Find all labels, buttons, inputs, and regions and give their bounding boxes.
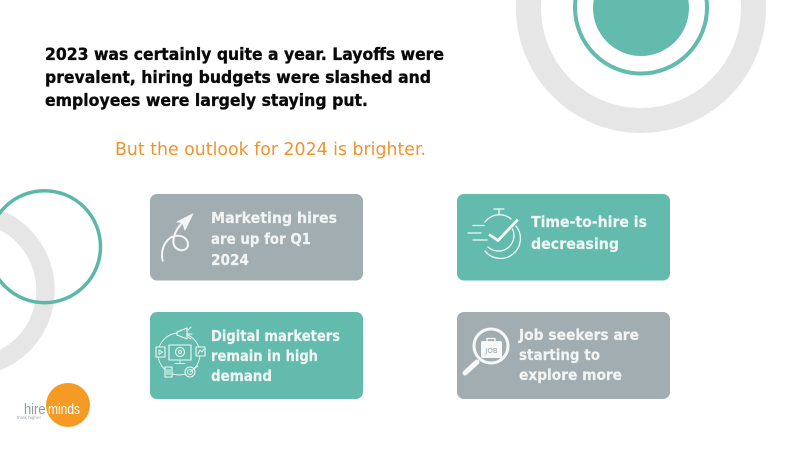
card: time-to-hire <box>457 194 670 280</box>
card text: Time-to-hire is <box>531 214 647 231</box>
card: job seekers <box>457 312 670 399</box>
card text <box>531 214 647 253</box>
card text: Digital marketers <box>211 328 340 345</box>
heading <box>45 44 444 110</box>
logo: hireminds: think higher <box>17 415 42 420</box>
decorative circles: top right <box>528 0 754 120</box>
icon: magnifier with job briefcase: JOB <box>484 347 498 355</box>
card text: explore more <box>519 367 622 384</box>
logo: hireminds: minds <box>48 402 80 418</box>
card text: demand <box>211 368 272 385</box>
logo: hireminds <box>17 383 90 427</box>
card text: Job seekers are <box>518 327 639 344</box>
subheading: But the outlook for 2024 is brighter. <box>115 140 426 160</box>
heading: employees were largely staying put. <box>45 90 368 110</box>
card text: decreasing <box>531 236 619 253</box>
card text: starting to <box>519 347 600 364</box>
icon: magnifier with job briefcase <box>465 329 508 373</box>
icon: digital marketing monitor <box>156 327 205 377</box>
card text <box>518 327 639 384</box>
heading: 2023 was certainly quite a year. Layoffs were <box>45 44 444 64</box>
icon: stopwatch with check <box>468 209 520 258</box>
icon: looping arrow <box>162 214 193 261</box>
heading: prevalent, hiring budgets were slashed and <box>45 67 431 87</box>
card text <box>211 210 337 269</box>
card: marketing hires <box>150 194 363 280</box>
logo: hireminds: hire <box>24 402 46 418</box>
card text: are up for Q1 <box>211 231 311 248</box>
card text: remain in high <box>211 348 318 365</box>
card text: Marketing hires <box>211 210 337 227</box>
decorative circles: left <box>0 191 100 367</box>
card text: 2024 <box>211 252 249 269</box>
card text <box>211 328 340 385</box>
card: digital marketers <box>150 312 363 399</box>
